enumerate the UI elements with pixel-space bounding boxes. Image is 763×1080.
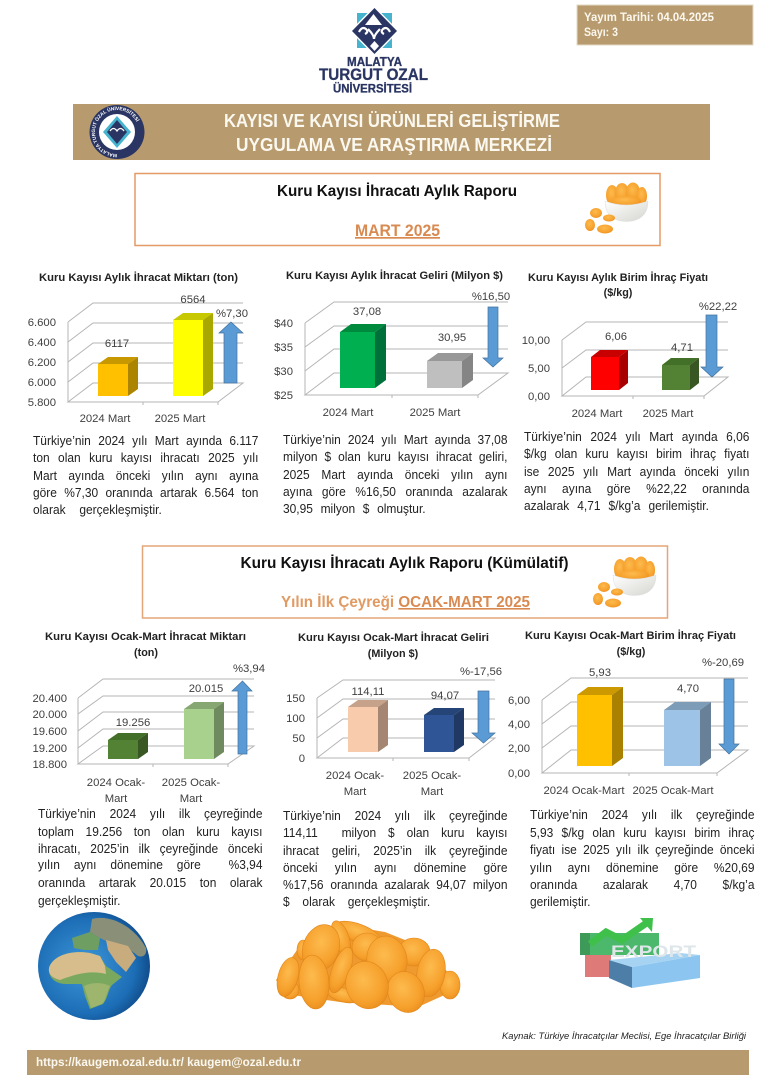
logo: Malatya Turgut Özal Üniversitesi: [319, 6, 428, 96]
text block: monthly revenue: Türkiye’nin 2024 yılı Mart ayında 37,08: [283, 432, 507, 447]
chart: Jan-Mar unit export price: [508, 629, 748, 797]
chart title: (ton): [134, 647, 158, 659]
arrow: down: [719, 679, 739, 754]
chart: monthly export revenue: 2024 Mart: [323, 407, 374, 419]
chart: Jan-Mar export quantity: 19.256: [116, 717, 150, 729]
text block: Jan-Mar revenue: Türkiye’nin 2024 yılı ilk çeyreğinde: [283, 808, 507, 823]
chart: monthly unit export price: 2025 Mart: [643, 408, 694, 420]
chart: Jan-Mar unit export price: 2025 Ocak-Mart: [632, 785, 714, 797]
chart: monthly export quantity: 2025 Mart: [155, 413, 206, 425]
text block: monthly quantity: Türkiye’nin 2024 yılı Mart ayında 6.117: [33, 433, 258, 448]
chart: Jan-Mar export revenue: 2024 Ocak-: [326, 770, 384, 782]
chart: monthly export quantity: 6.000: [28, 377, 56, 389]
chart: monthly export revenue: $35: [274, 342, 293, 354]
text block: Jan-Mar quantity: Türkiye’nin 2024 yılı ilk çeyreğinde: [38, 806, 262, 821]
chart: monthly export quantity: 6117: [105, 338, 129, 350]
text block: monthly revenue: ayına göre %16,50 oranında azalarak: [283, 484, 507, 499]
text block: Jan-Mar quantity: ihracatı, 2025’in ilk çeyreğinde önceki: [38, 841, 262, 856]
source note: Kaynak: Türkiye İhracatçılar Meclisi, Ege İhracatçılar Birliği: [502, 1031, 747, 1042]
banner title: UYGULAMA VE ARAŞTIRMA MERKEZİ: [236, 134, 552, 155]
chart: Jan-Mar export revenue: 94,07: [431, 690, 459, 702]
text block: monthly unit price: Türkiye’nin 2024 yılı Mart ayında 6,06: [524, 429, 749, 444]
arrow: down: [701, 315, 723, 377]
chart: monthly export quantity: 6.600: [28, 317, 56, 329]
text block: Jan-Mar quantity: [38, 806, 262, 908]
text block: monthly quantity: Mart ayında önceki yılın aynı ayına: [33, 468, 258, 483]
chart: Jan-Mar unit export price: 0,00: [508, 768, 530, 780]
logo text: ÜNİVERSİTESİ: [333, 80, 412, 96]
chart: Jan-Mar export revenue: 114,11: [352, 686, 384, 698]
footer bar: [27, 1050, 749, 1075]
text block: Jan-Mar revenue: ihracat geliri, 2025’in ilk çeyreğinde: [283, 843, 507, 858]
chart: monthly export revenue: 37,08: [353, 306, 381, 318]
chart: Jan-Mar export quantity: 19.600: [32, 726, 67, 738]
text block: Jan-Mar unit price: fiyatı ise 2025 yılı ilk çeyreğinde önceki: [530, 842, 754, 857]
chart title: Kuru Kayısı Ocak-Mart İhracat Geliri: [298, 631, 489, 644]
chart: Jan-Mar export quantity: %3,94: [233, 663, 265, 675]
text block: Jan-Mar unit price: [530, 807, 754, 909]
bar: 2024 Ocak-Mart: [348, 700, 388, 752]
chart: monthly unit export price: 5,00: [528, 363, 550, 375]
bar: 2024 Ocak-Mart: [577, 687, 623, 766]
chart title: Kuru Kayısı Aylık Birim İhraç Fiyatı: [528, 271, 708, 284]
chart: monthly export quantity: 6.200: [28, 357, 56, 369]
logo text: MALATYA: [347, 55, 402, 69]
chart title: Kuru Kayısı Ocak-Mart Birim İhraç Fiyatı: [525, 629, 736, 642]
icon: bowl of apricots: [593, 556, 656, 608]
chart: Jan-Mar unit export price: 5,93: [589, 667, 611, 679]
logo text: [319, 55, 428, 96]
text block: Jan-Mar unit price: Türkiye’nin 2024 yılı ilk çeyreğinde: [530, 807, 754, 822]
chart: Jan-Mar export revenue: 2025 Ocak-: [403, 770, 461, 782]
banner title: [224, 110, 560, 155]
text block: Jan-Mar unit price: gerilemiştir.: [530, 894, 590, 909]
chart: Jan-Mar export quantity: 18.800: [32, 759, 67, 771]
text block: Jan-Mar revenue: $ olarak gerçekleşmiştir.: [283, 894, 430, 909]
chart: monthly export revenue: $40: [274, 318, 293, 330]
chart: monthly unit export price: 2024 Mart: [572, 408, 623, 420]
chart: Jan-Mar unit export price: 6,00: [508, 695, 530, 707]
chart title: Kuru Kayısı Ocak-Mart İhracat Miktarı: [45, 630, 246, 643]
icon: bowl of apricots: [585, 182, 648, 234]
chart: monthly export revenue: %16,50: [472, 291, 510, 303]
chart: monthly export revenue: 2025 Mart: [410, 407, 461, 419]
chart: Jan-Mar export revenue: 50: [292, 733, 305, 745]
chart: monthly export quantity: [28, 271, 248, 425]
text block: Jan-Mar revenue: [283, 808, 507, 909]
heading: Kuru Kayısı İhracatı Aylık Raporu: [277, 182, 517, 200]
footer bar: https://kaugem.ozal.edu.tr/ kaugem@ozal.edu.tr: [36, 1055, 301, 1069]
chart: Jan-Mar export revenue: 0: [299, 753, 305, 765]
chart title: Kuru Kayısı Aylık İhracat Geliri (Milyon $): [286, 269, 503, 282]
chart: monthly export revenue: $30: [274, 366, 293, 378]
text block: Jan-Mar quantity: yılın aynı dönemine göre %3,94: [38, 857, 262, 872]
chart: monthly export quantity: 5.800: [28, 397, 56, 409]
bar: 2024 Mart: [340, 324, 386, 388]
text block: monthly revenue: 30,95 milyon $ olmuştur.: [283, 501, 426, 516]
text block: monthly revenue: 2025 Mart ayında önceki yılın aynı: [283, 467, 507, 482]
chart: Jan-Mar export revenue: Mart: [421, 786, 444, 798]
arrow: up: [232, 681, 252, 754]
chart: monthly export quantity: 2024 Mart: [80, 413, 131, 425]
chart: Jan-Mar export revenue: 100: [286, 713, 305, 725]
arrow: down: [483, 307, 503, 367]
chart: Jan-Mar export revenue: Mart: [344, 786, 367, 798]
chart: monthly export revenue: 30,95: [438, 332, 466, 344]
illustration: dried apricots pile: [273, 916, 460, 1019]
text block: Jan-Mar revenue: önceki yılın aynı dönemine göre: [283, 860, 507, 875]
text block: monthly quantity: olarak gerçekleşmiştir.: [33, 502, 162, 517]
chart: monthly export quantity: %7,30: [216, 308, 248, 320]
text block: monthly unit price: azalarak 4,71 $/kg’a gerilemiştir.: [524, 498, 709, 513]
chart: Jan-Mar unit export price: 2,00: [508, 743, 530, 755]
illustration: globe: [38, 912, 150, 1020]
bar: 2025 Ocak-Mart: [184, 702, 224, 759]
text block: monthly revenue: milyon $ olan kuru kayısı ihracat geliri,: [283, 449, 507, 464]
chart: Jan-Mar unit export price: 4,00: [508, 719, 530, 731]
text block: monthly quantity: [33, 433, 258, 517]
banner title: KAYISI VE KAYISI ÜRÜNLERİ GELİŞTİRME: [224, 110, 560, 131]
bar: 2025 Mart: [662, 358, 699, 390]
chart: Jan-Mar export quantity: Mart: [105, 793, 128, 805]
logo text: TURGUT OZAL: [319, 65, 428, 84]
text block: Jan-Mar revenue: %17,56 oranında azalarak 94,07 milyon: [283, 877, 507, 892]
text block: Jan-Mar quantity: gerçekleşmiştir.: [38, 893, 120, 908]
chart: monthly unit export price: 10,00: [522, 335, 550, 347]
chart: monthly unit export price: [522, 271, 737, 420]
arrow: up: [219, 322, 243, 383]
chart: Jan-Mar export quantity: 2024 Ocak-: [87, 777, 145, 789]
bar: 2025 Ocak-Mart: [424, 708, 464, 752]
text block: monthly unit price: [524, 429, 750, 513]
chart: monthly unit export price: 0,00: [528, 391, 550, 403]
chart: Jan-Mar export revenue: [286, 631, 502, 798]
bar: 2025 Ocak-Mart: [664, 702, 711, 766]
text block: monthly unit price: ise 2025 yılı Mart ayında önceki yılın: [524, 464, 749, 479]
subheading: period: Yılın İlk Çeyreği OCAK-MART 2025: [281, 593, 530, 611]
chart: monthly unit export price: 4,71: [671, 342, 693, 354]
chart: Jan-Mar unit export price: 4,70: [677, 683, 699, 695]
chart: Jan-Mar export quantity: 20.015: [189, 683, 223, 695]
chart: monthly unit export price: %22,22: [699, 301, 737, 313]
heading: Kuru Kayısı İhracatı Aylık Raporu (Kümülatif): [240, 554, 568, 572]
chart title: ($/kg): [604, 287, 633, 299]
publication date box: Sayı: 3: [584, 25, 618, 39]
text block: Jan-Mar unit price: 5,93 $/kg olan kuru kayısı birim ihraç: [530, 825, 754, 840]
illustration: export containers: [580, 918, 700, 988]
chart: Jan-Mar export quantity: 20.000: [32, 709, 67, 721]
chart: Jan-Mar export revenue: %-17,56: [460, 666, 502, 678]
publication date box: Yayım Tarihi: 04.04.2025: [584, 10, 714, 24]
text block: Jan-Mar revenue: 114,11 milyon $ olan kuru kayısı: [283, 825, 507, 840]
subheading: month: MART 2025: [355, 221, 440, 240]
chart title: [525, 629, 736, 658]
chart: monthly unit export price: 6,06: [605, 331, 627, 343]
bar: 2024 Mart: [98, 357, 138, 396]
illustration: export containers: EXPORT: [611, 942, 697, 961]
chart: Jan-Mar export quantity: 20.400: [32, 693, 67, 705]
chart title: Kuru Kayısı Aylık İhracat Miktarı (ton): [39, 271, 238, 284]
chart: monthly export revenue: $25: [274, 390, 293, 402]
icon: university seal: MALATYA TURGUT ÖZAL ÜNİVERSİTESİ: [92, 106, 140, 158]
panel: cumulative report heading: [142, 546, 668, 618]
chart: Jan-Mar unit export price: 2024 Ocak-Mart: [544, 785, 625, 797]
panel: monthly report heading: [135, 174, 660, 246]
bar: 2024 Ocak-Mart: [108, 733, 148, 759]
chart: monthly export revenue: [274, 269, 510, 419]
text block: Jan-Mar unit price: yılın aynı dönemine göre %20,69: [530, 860, 754, 875]
bar: 2025 Mart: [427, 353, 473, 388]
chart: Jan-Mar export quantity: [32, 630, 265, 805]
chart: monthly export quantity: 6564: [180, 294, 206, 306]
chart title: (Milyon $): [368, 648, 419, 660]
chart: Jan-Mar export quantity: 19.200: [32, 743, 67, 755]
icon: university emblem: [350, 6, 399, 56]
text block: Jan-Mar quantity: toplam 19.256 ton olan kuru kayısı: [38, 824, 262, 839]
text block: monthly unit price: $/kg olan kuru kayısı birim ihraç fiyatı: [524, 446, 749, 461]
bar: 2024 Mart: [591, 350, 628, 390]
chart: Jan-Mar export quantity: Mart: [180, 793, 203, 805]
text block: Jan-Mar quantity: oranında artarak 20.015 ton olarak: [38, 875, 262, 890]
chart: Jan-Mar export revenue: 150: [286, 693, 305, 705]
chart: monthly export quantity: 6.400: [28, 337, 56, 349]
chart title: [298, 631, 489, 660]
publication date box: [577, 5, 753, 45]
chart: Jan-Mar unit export price: %-20,69: [702, 657, 744, 669]
text block: Jan-Mar unit price: oranında azalarak 4,70 $/kg’a: [530, 877, 754, 892]
text block: monthly quantity: ton olan kuru kayısı ihracatı 2025 yılı: [33, 450, 258, 465]
arrow: down: [472, 691, 495, 743]
header banner: [73, 104, 710, 160]
bar: 2025 Mart: [173, 313, 213, 396]
chart title: [528, 271, 708, 299]
chart title: [45, 630, 246, 659]
text block: monthly quantity: göre %7,30 oranında artarak 6.564 ton: [33, 485, 258, 500]
chart title: ($/kg): [617, 646, 646, 658]
text block: monthly unit price: aynı ayına göre %22,22 oranında: [524, 481, 749, 496]
text block: monthly revenue: [283, 432, 508, 516]
chart: Jan-Mar export quantity: 2025 Ocak-: [162, 777, 220, 789]
